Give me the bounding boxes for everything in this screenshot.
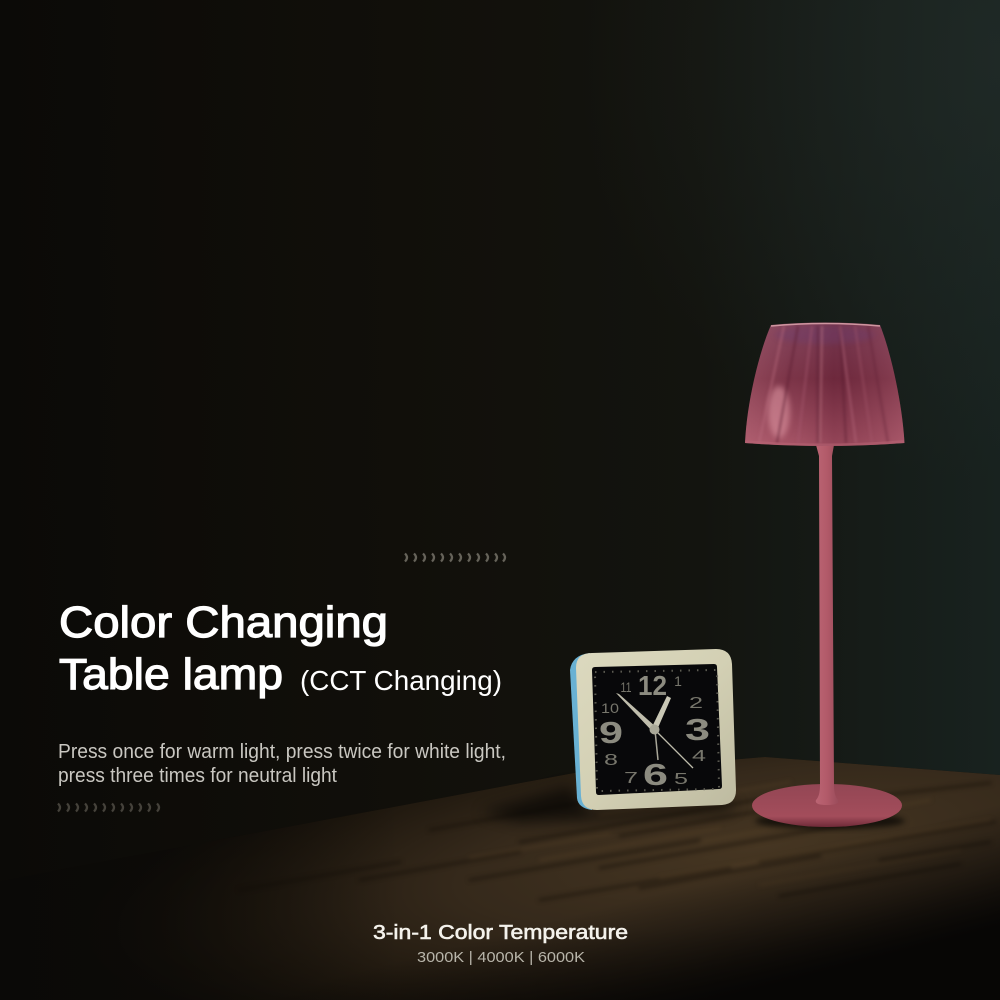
title: Table lamp: [59, 650, 283, 699]
clock blue side: [570, 653, 592, 810]
table lamp: [740, 318, 910, 829]
clock numerals: 10: [601, 700, 619, 716]
title: Color Changing: [59, 598, 388, 647]
clock hands: [616, 693, 693, 768]
clock numerals: 6: [643, 757, 668, 792]
lamp base shadow: [755, 813, 905, 829]
clock shadow: [480, 786, 738, 822]
clock numerals: 4: [692, 748, 706, 765]
clock face: [592, 664, 722, 795]
title: [59, 598, 502, 699]
clock numerals: 2: [689, 695, 703, 712]
clock numerals: 5: [674, 771, 688, 788]
description text: press three times for neutral light: [58, 765, 337, 787]
chevrons: top: [405, 554, 505, 562]
bottom caption: [373, 922, 628, 966]
title: (CCT Changing): [300, 665, 502, 696]
bottom caption: 3000K | 4000K | 6000K: [417, 949, 585, 966]
alarm clock: [480, 649, 738, 822]
clock numerals: [599, 670, 710, 792]
description text: Press once for warm light, press twice for white light,: [58, 741, 506, 763]
clock numerals: 1: [674, 673, 682, 689]
clock bezel: [576, 649, 736, 810]
wooden table: [236, 757, 1000, 1000]
clock numerals: 12: [638, 670, 667, 701]
lamp base: [752, 784, 902, 827]
clock numerals: 9: [599, 715, 623, 750]
lamp stem: [816, 445, 838, 805]
clock numerals: 7: [624, 770, 638, 787]
clock minute ticks: [595, 670, 719, 791]
chevrons: bottom: [58, 804, 159, 812]
clock numerals: 8: [604, 752, 618, 769]
clock numerals: 11: [620, 679, 632, 695]
description text: [58, 741, 506, 787]
lamp shade: [745, 322, 904, 446]
clock numerals: 3: [685, 712, 710, 747]
bottom caption: 3-in-1 Color Temperature: [373, 922, 628, 944]
